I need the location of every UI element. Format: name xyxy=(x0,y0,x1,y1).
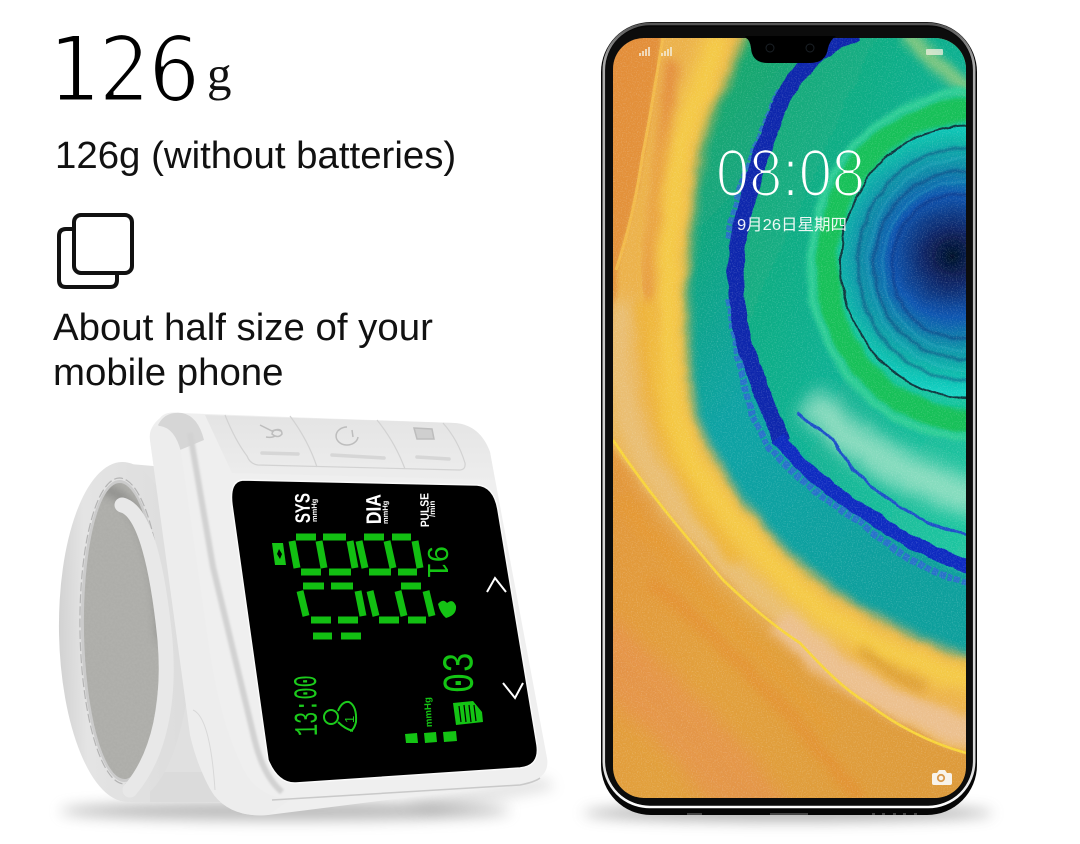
status icons xyxy=(639,47,943,56)
arrow down xyxy=(503,683,523,698)
wallpaper xyxy=(613,38,966,798)
DIA label: DIA xyxy=(362,494,386,524)
monitor body xyxy=(150,413,547,815)
mmHg unit: mmHg xyxy=(422,697,435,727)
teal field xyxy=(687,30,980,659)
felt lining xyxy=(84,483,159,779)
top buttons xyxy=(225,415,465,470)
memory number: 03 xyxy=(436,652,487,694)
clock reading: 13:00 xyxy=(289,675,327,736)
shell crease xyxy=(190,433,282,792)
button icons xyxy=(260,425,434,445)
icon: user one xyxy=(324,702,357,731)
weight caption: 126g (without batteries) xyxy=(55,134,456,177)
icon: memory card xyxy=(453,701,483,725)
bottom ports xyxy=(687,813,917,815)
icon: camera xyxy=(932,770,952,785)
smartphone xyxy=(584,22,992,830)
yellow band xyxy=(668,30,980,682)
wrist cuff xyxy=(59,462,218,802)
pressure bars xyxy=(405,731,457,743)
systolic digits xyxy=(292,537,420,572)
gold band xyxy=(606,30,980,756)
clock: 08:08 xyxy=(716,136,865,211)
PULSE label: /min xyxy=(428,500,437,517)
size caption: About half size of your xyxy=(53,306,433,349)
pulse value: 91 xyxy=(421,546,453,578)
icon: user one: 1 xyxy=(342,716,357,723)
SYS label xyxy=(291,493,319,523)
battery indicator xyxy=(272,543,286,565)
arrow up xyxy=(487,578,506,592)
notch xyxy=(745,36,836,63)
weight figure: 126 g: g xyxy=(207,46,232,101)
display screen xyxy=(231,480,537,783)
phone shadow xyxy=(583,805,993,821)
button indents xyxy=(262,453,449,459)
yellow flow line xyxy=(613,440,966,753)
SYS label: mmHg xyxy=(310,498,319,522)
diastolic digits xyxy=(300,586,432,636)
thin upper line xyxy=(616,38,663,270)
phone frame xyxy=(601,22,977,815)
top face xyxy=(205,415,495,480)
thick blue river xyxy=(727,90,985,586)
DIA label: mmHg xyxy=(381,500,390,524)
front cameras xyxy=(766,44,814,52)
monitor shadow xyxy=(60,778,555,820)
central vortex xyxy=(838,124,966,400)
icon: overlapping squares xyxy=(59,215,132,287)
PULSE label xyxy=(417,493,437,527)
SYS label: SYS xyxy=(291,493,315,523)
icon: heart xyxy=(438,601,456,618)
weight figure: 126 g: 126 xyxy=(49,18,198,123)
pale speckled band xyxy=(810,400,985,500)
thin blue vein xyxy=(796,412,966,536)
size caption: mobile phone xyxy=(53,351,284,394)
PULSE label: PULSE xyxy=(417,493,432,527)
blood pressure monitor xyxy=(56,413,555,820)
green ring xyxy=(836,96,966,408)
date: 9月26日星期四 xyxy=(737,216,847,234)
